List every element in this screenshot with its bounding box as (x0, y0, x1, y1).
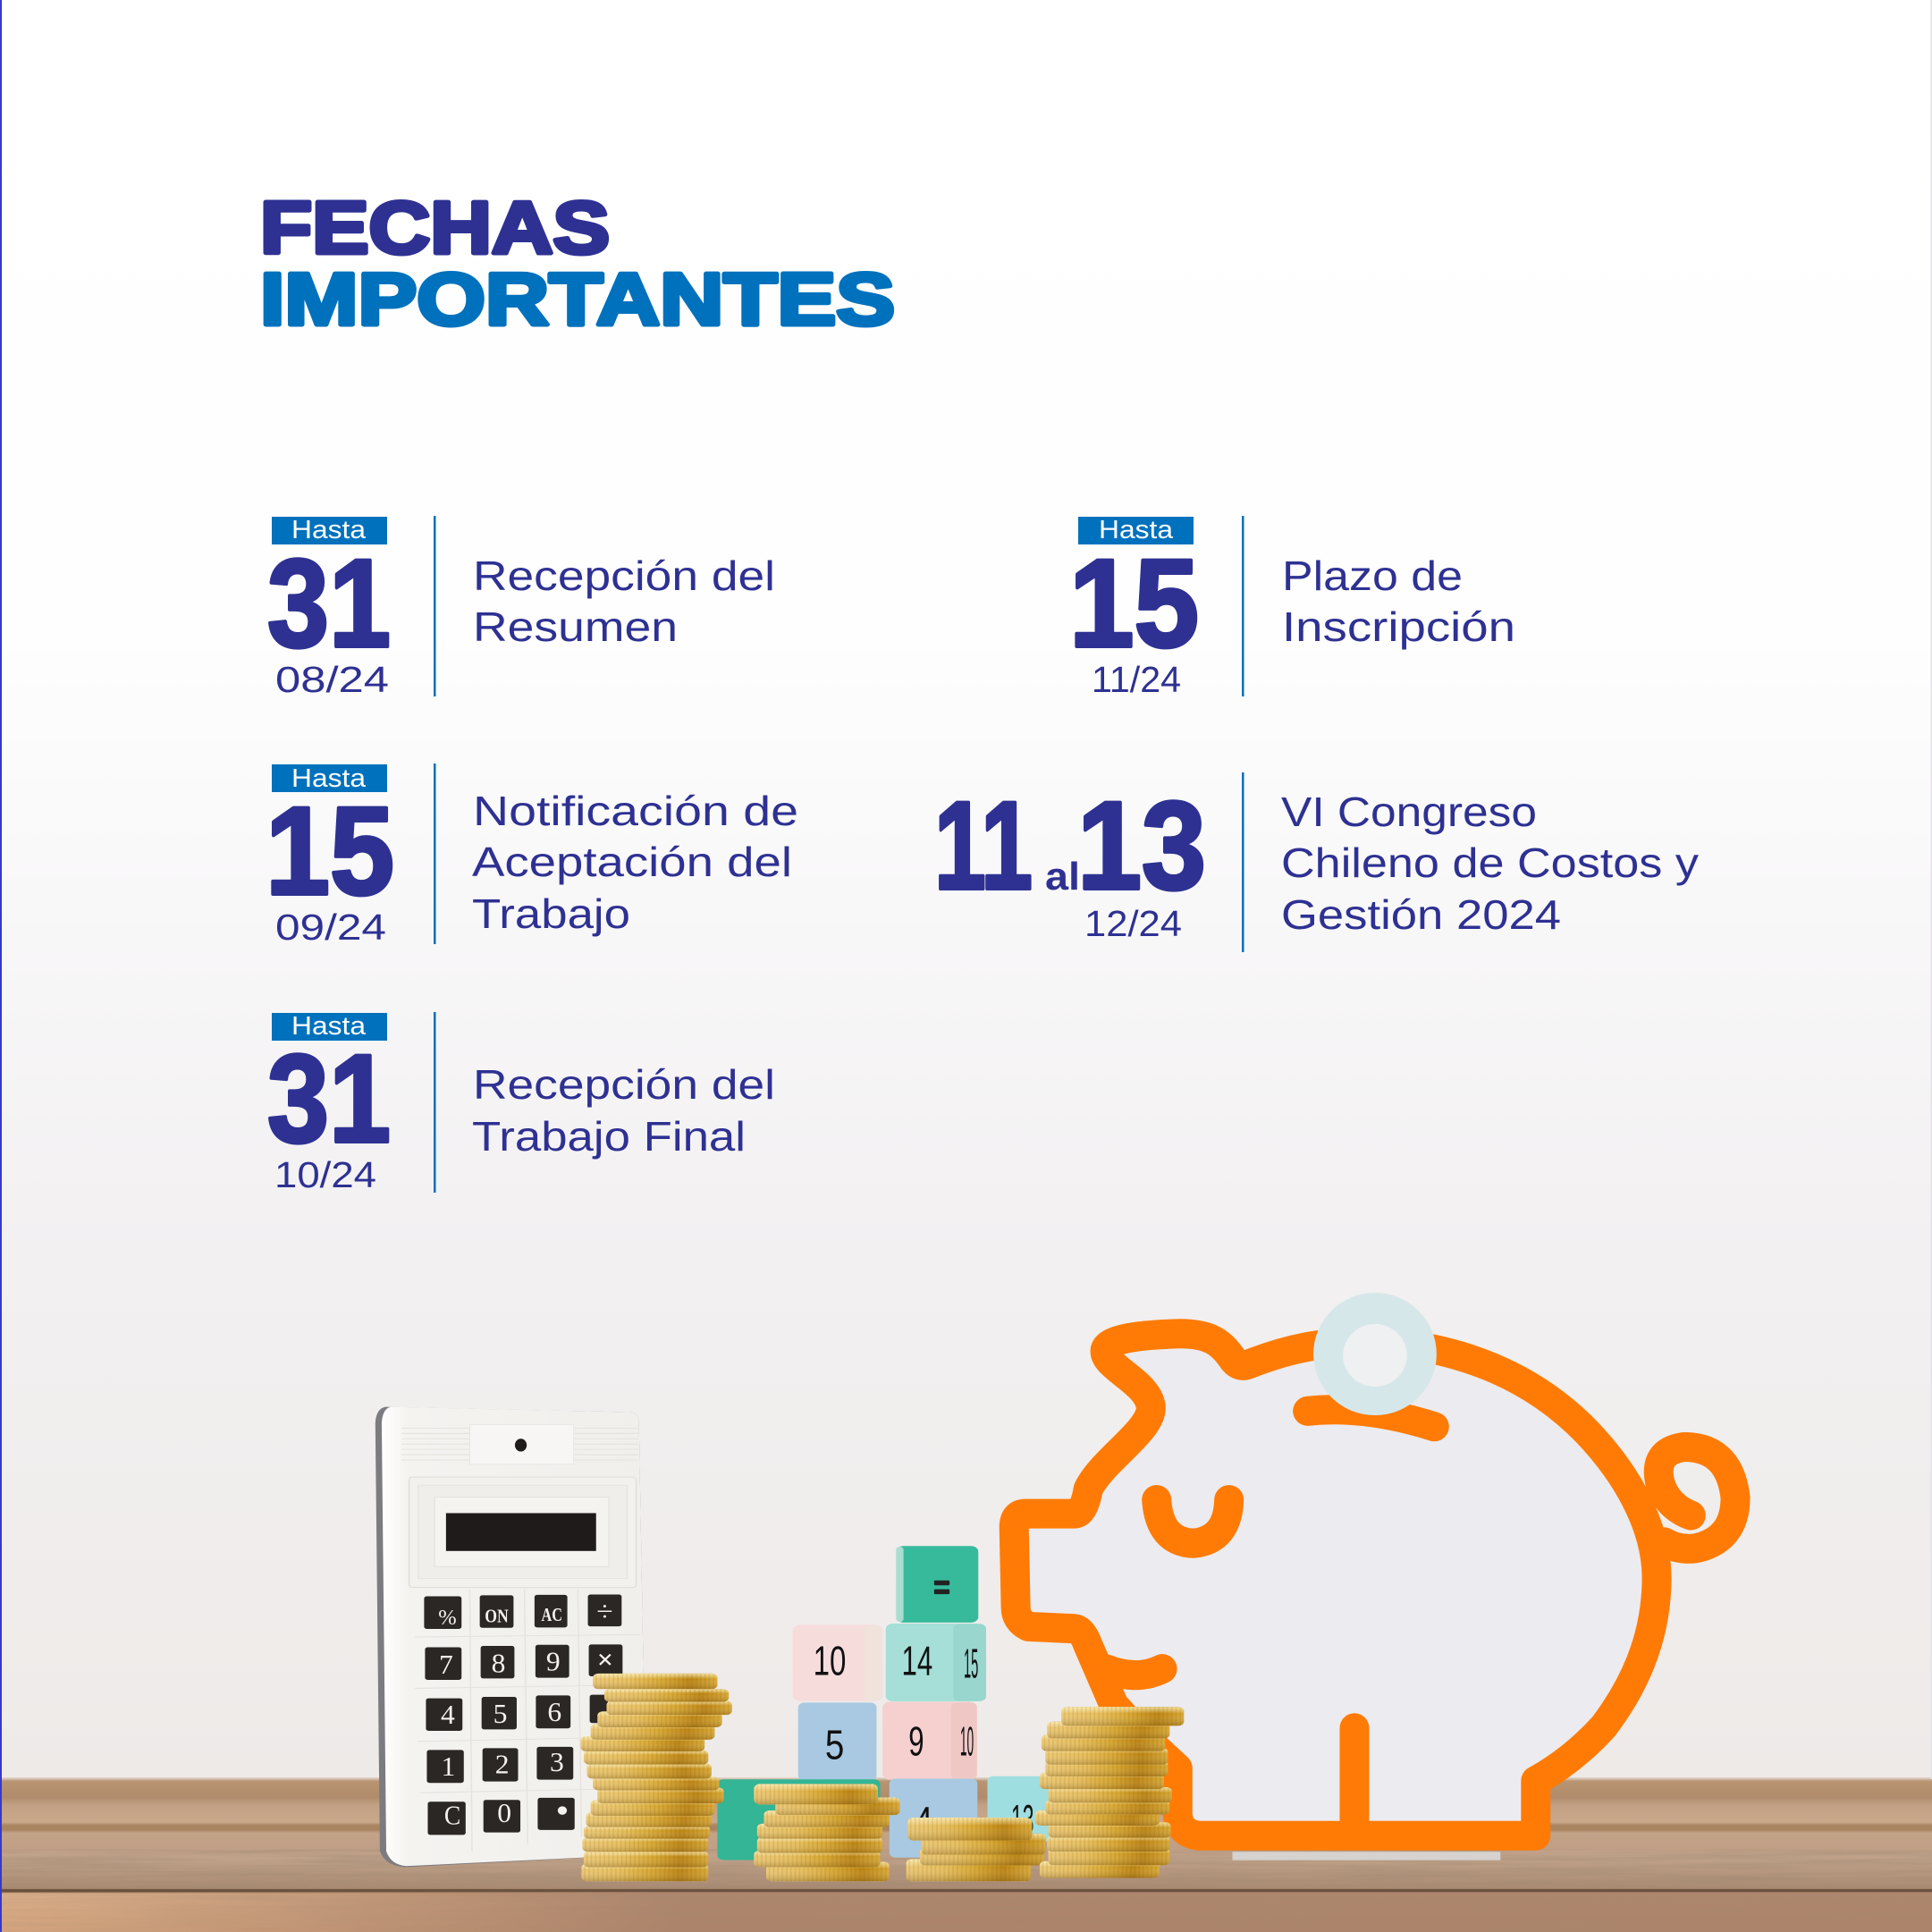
description: VI Congreso (1281, 789, 1537, 835)
description (472, 788, 798, 937)
pig coin slot (1308, 1410, 1434, 1427)
pig tail (1658, 1447, 1735, 1548)
badge (272, 1012, 387, 1041)
calculator keys: ON (485, 1607, 509, 1627)
month: 09/24 (275, 907, 386, 948)
coin stack 4 (1035, 1707, 1184, 1878)
divider (434, 1012, 436, 1193)
description: Notificación de (473, 788, 798, 834)
calculator keys: 5 (494, 1698, 507, 1729)
calculator keys: 7 (439, 1649, 453, 1680)
description: Chileno de Costos y (1281, 839, 1699, 886)
pig stand (1232, 1852, 1500, 1860)
coin stack 2 (754, 1784, 900, 1881)
number blocks: 15 (964, 1641, 978, 1687)
divider (434, 516, 436, 696)
piggy bank (1014, 1293, 1735, 1878)
calculator keys: ÷ (596, 1596, 613, 1626)
number blocks: 4 (915, 1798, 932, 1844)
calculator keys: AC (542, 1606, 562, 1625)
number blocks: 13 (1011, 1796, 1034, 1843)
description: Resumen (473, 603, 678, 650)
title line 2: IMPORTANTES (260, 257, 895, 341)
description (473, 553, 775, 650)
number blocks: 9 (908, 1718, 924, 1765)
description: Inscripción (1282, 603, 1515, 650)
description (472, 1061, 775, 1160)
day number: 31 (267, 533, 391, 673)
description: Trabajo Final (472, 1113, 746, 1160)
calculator keys: 0 (497, 1797, 511, 1828)
wooden table (0, 1777, 1932, 1932)
description (1282, 553, 1515, 650)
date item: Plazo de Inscripción (1069, 516, 1515, 700)
date item: VI Congreso (934, 772, 1699, 952)
calculator keys: 9 (546, 1646, 561, 1677)
badge: Hasta (291, 516, 367, 544)
month: 10/24 (274, 1154, 376, 1195)
badge (272, 764, 387, 793)
calculator keys: % (438, 1606, 457, 1630)
coin above pig (1313, 1293, 1437, 1415)
day number: 31 (267, 1028, 391, 1168)
calculator keys: 2 (495, 1749, 510, 1779)
month: 11/24 (1092, 659, 1181, 700)
badge: Hasta (291, 1012, 367, 1041)
al connector: al (1045, 855, 1080, 899)
number blocks: 14 (902, 1638, 932, 1684)
divider (1242, 772, 1244, 952)
badge (1078, 516, 1194, 544)
coin stack 1 (580, 1674, 732, 1881)
description: Recepción del (473, 1061, 775, 1108)
day range start: 11 (934, 775, 1033, 915)
description: Recepción del (473, 553, 775, 599)
number blocks: 10 (814, 1638, 846, 1684)
calculator keys: 6 (547, 1696, 561, 1727)
divider (434, 764, 436, 944)
date item: Recepción del Trabajo Final (267, 1012, 775, 1195)
month: 12/24 (1084, 903, 1182, 944)
number blocks: 10 (960, 1718, 974, 1765)
badge: Hasta (291, 764, 367, 793)
badge (272, 516, 387, 544)
calculator keys: C (444, 1800, 460, 1830)
date item: Recepción del Resumen (267, 516, 775, 700)
badge: Hasta (1099, 516, 1174, 544)
title line 1: FECHAS (260, 186, 610, 269)
title (260, 186, 895, 341)
pig leg (1339, 1728, 1369, 1832)
day number: 15 (1069, 533, 1199, 673)
number blocks (717, 1546, 1051, 1860)
description: Trabajo (472, 890, 630, 937)
date item: Notificación de Aceptación (266, 764, 798, 948)
divider (1242, 516, 1244, 696)
calculator keys: 3 (550, 1746, 564, 1777)
pig body (1014, 1334, 1657, 1835)
description (1281, 789, 1699, 938)
calculator keys (424, 1595, 622, 1835)
pig eye (1157, 1500, 1229, 1543)
description: Plazo de (1282, 553, 1463, 599)
day number: 15 (266, 780, 394, 921)
calculator keys: 1 (442, 1751, 455, 1782)
description: Gestión 2024 (1281, 891, 1561, 938)
coin stack 3 (907, 1818, 1046, 1881)
pig mouth (1105, 1669, 1162, 1675)
calculator keys: × (597, 1644, 613, 1675)
calculator keys: 8 (492, 1648, 505, 1679)
number blocks: 5 (825, 1722, 844, 1768)
calculator keys: 4 (441, 1699, 455, 1730)
description: Aceptación del (472, 839, 792, 885)
photo: calculator, blocks and coins (375, 1407, 1051, 1881)
calculator (375, 1407, 644, 1867)
month: 08/24 (275, 659, 389, 700)
day range end: 13 (1077, 775, 1206, 915)
